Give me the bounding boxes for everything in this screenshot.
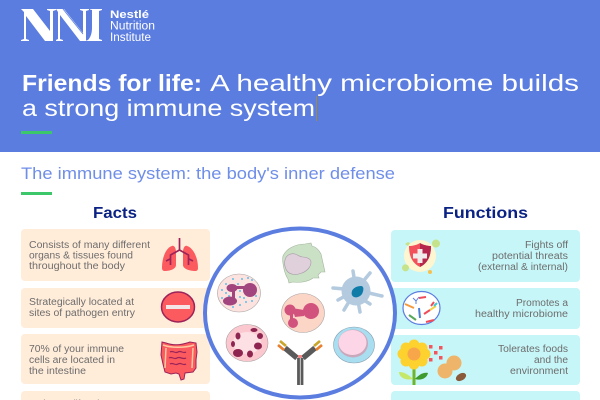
panel: fact 3: [21, 334, 210, 384]
panel: function 3: [391, 335, 580, 385]
fact 3 text: [29, 344, 124, 377]
fact 1 text: [29, 240, 150, 272]
title: A healthy microbiome builds: [210, 70, 579, 96]
panel: fact 2: [21, 288, 210, 328]
fact 3 text: the intestine: [29, 366, 86, 377]
function 1 text: [478, 240, 568, 273]
icon: intestine: [161, 342, 197, 380]
icon: pollen dots: [429, 345, 442, 362]
icon: flower: [398, 340, 430, 385]
logo wordmark: Nestlé: [110, 9, 149, 21]
panel: fact 1: [21, 229, 210, 281]
fact 3 text: cells are located in: [29, 355, 115, 366]
cell: macrophage: [283, 243, 325, 283]
fact 2 text: sites of pathogen entry: [29, 308, 135, 319]
text caret: [316, 96, 317, 121]
heading: Facts: Facts: [93, 205, 137, 222]
fact 2 text: Strategically located at: [29, 297, 134, 308]
function 3 text: and the: [534, 355, 568, 366]
icon: antibody: [278, 341, 322, 385]
icon: no-entry sign: [162, 292, 194, 322]
fact 3 text: 70% of your immune: [29, 344, 124, 355]
icon: peanut and seed: [438, 356, 468, 383]
function 2 text: [475, 298, 568, 320]
function 3 text: Tolerates foods: [498, 344, 568, 355]
icon: lungs: [162, 238, 198, 271]
function 1 text: potential threats: [492, 251, 568, 262]
logo: Nestlé Nutrition Institute: [21, 9, 155, 44]
title accent line: [21, 131, 52, 134]
fact 2 text: [29, 297, 135, 319]
cell: neutrophil: [226, 324, 268, 362]
circle outline: [205, 228, 395, 398]
cell: lymphocyte: [334, 327, 374, 363]
section heading: The immune system: the body's inner defense: [21, 164, 395, 183]
fact 1 text: throughout the body: [29, 261, 125, 272]
panel: function 4: [391, 391, 580, 400]
fact 1 text: organs & tissues found: [29, 250, 133, 262]
cell: granulocyte with blue granules: [218, 274, 260, 312]
circle of immune cells: [205, 228, 395, 398]
function 3 text: [498, 344, 568, 377]
function 3 text: environment: [510, 366, 568, 377]
title: a strong immune system: [22, 95, 315, 121]
logo wordmark: [110, 9, 155, 44]
panel: fact 4: [21, 391, 210, 400]
function 1 text: Fights off: [525, 240, 568, 251]
logo wordmark: Nutrition: [110, 20, 155, 32]
function 2 text: Promotes a: [516, 298, 568, 309]
logo mark: [21, 9, 102, 41]
title: Friends for life:: [22, 70, 202, 96]
cell: dendritic: [333, 271, 382, 312]
panel: function 2: [391, 288, 580, 329]
heading: Functions: Functions: [443, 205, 528, 222]
header band: [0, 0, 600, 152]
panel: function 1: [391, 230, 580, 282]
logo wordmark: Institute: [110, 32, 151, 44]
function 1 text: (external & internal): [478, 262, 568, 273]
fact 1 text: Consists of many different: [29, 240, 150, 251]
function 2 text: healthy microbiome: [475, 309, 568, 320]
section accent line: [21, 192, 52, 195]
icon: shield: [402, 240, 440, 274]
title: [22, 70, 579, 121]
cell: mast cell: [282, 294, 324, 332]
icon: microbiome dish: [403, 292, 440, 324]
